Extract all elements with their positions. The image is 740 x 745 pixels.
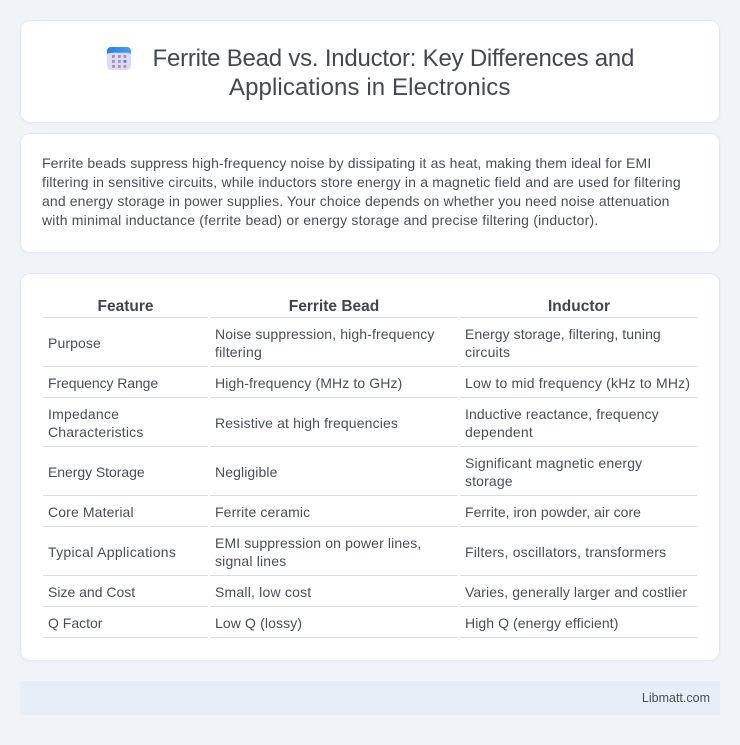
row: Impedance Characteristics: Characteristics: [48, 424, 144, 440]
Q inductor: High Q (energy efficient): [465, 615, 618, 631]
title: Ferrite Bead vs. Inductor: Key Differences and: [152, 45, 634, 72]
summary text: and energy storage in power supplies. Your choice depends on whether you need noise attenuation: [42, 193, 670, 209]
Frequency ferrite bead: High-frequency (MHz to GHz): [215, 375, 402, 391]
row: Size and Cost: Size and Cost: [48, 584, 135, 600]
Energy inductor: Significant magnetic energy: [465, 455, 642, 471]
Energy inductor: storage: [465, 473, 513, 489]
row: Purpose: Purpose: [48, 335, 101, 351]
Energy ferrite bead: Negligible: [215, 464, 277, 480]
title: Applications in Electronics: [229, 74, 511, 101]
header: Ferrite Bead: Ferrite Bead: [289, 298, 379, 315]
Core inductor: Ferrite, iron powder, air core: [465, 504, 641, 520]
Purpose ferrite bead: filtering: [215, 344, 262, 360]
comparison table: [43, 298, 697, 638]
Purpose inductor: Energy storage, filtering, tuning: [465, 326, 661, 342]
Applications inductor: Filters, oscillators, transformers: [465, 544, 666, 560]
summary text: with minimal inductance (ferrite bead) or energy storage and precise filtering (inductor).: [42, 212, 598, 228]
Impedance ferrite bead: Resistive at high frequencies: [215, 415, 398, 431]
row: Core Material: Core Material: [48, 504, 134, 520]
summary card: [20, 133, 720, 253]
footer bar: [20, 681, 720, 715]
Impedance inductor: Inductive reactance, frequency: [465, 406, 659, 422]
Purpose inductor: circuits: [465, 344, 510, 360]
header: Feature: Feature: [98, 298, 154, 315]
Energy inductor: [465, 455, 642, 489]
footer text: Libmatt.com: [642, 691, 710, 705]
Size ferrite bead: Small, low cost: [215, 584, 311, 600]
title card: [20, 20, 720, 123]
table card: [20, 273, 720, 661]
Impedance inductor: [465, 406, 659, 440]
Impedance inductor: dependent: [465, 424, 533, 440]
Purpose inductor: [465, 326, 661, 360]
row: Frequency Range: Frequency Range: [48, 375, 158, 391]
Core ferrite bead: Ferrite ceramic: [215, 504, 310, 520]
row: Energy Storage: Energy Storage: [48, 464, 145, 480]
row: Typical Applications: Typical Applications: [48, 544, 176, 560]
row: Q Factor: Q Factor: [48, 615, 102, 631]
header: Inductor: Inductor: [548, 298, 610, 315]
Size inductor: Varies, generally larger and costlier: [465, 584, 687, 600]
summary text: [42, 155, 681, 228]
Frequency inductor: Low to mid frequency (kHz to MHz): [465, 375, 690, 391]
row: Impedance Characteristics: [48, 406, 144, 440]
Applications ferrite bead: signal lines: [215, 553, 286, 569]
icon: calendar: [107, 47, 131, 70]
summary text: Ferrite beads suppress high-frequency noise by dissipating it as heat, making them ideal for EMI: [42, 155, 651, 171]
Purpose ferrite bead: [215, 326, 435, 360]
Applications ferrite bead: [215, 535, 421, 569]
title: [152, 45, 634, 101]
summary text: filtering in sensitive circuits, while inductors store energy in a magnetic field and are used for filtering: [42, 174, 681, 190]
Applications ferrite bead: EMI suppression on power lines,: [215, 535, 421, 551]
Purpose ferrite bead: Noise suppression, high-frequency: [215, 326, 435, 342]
Q ferrite bead: Low Q (lossy): [215, 615, 302, 631]
row: Impedance Characteristics: Impedance: [48, 406, 119, 422]
